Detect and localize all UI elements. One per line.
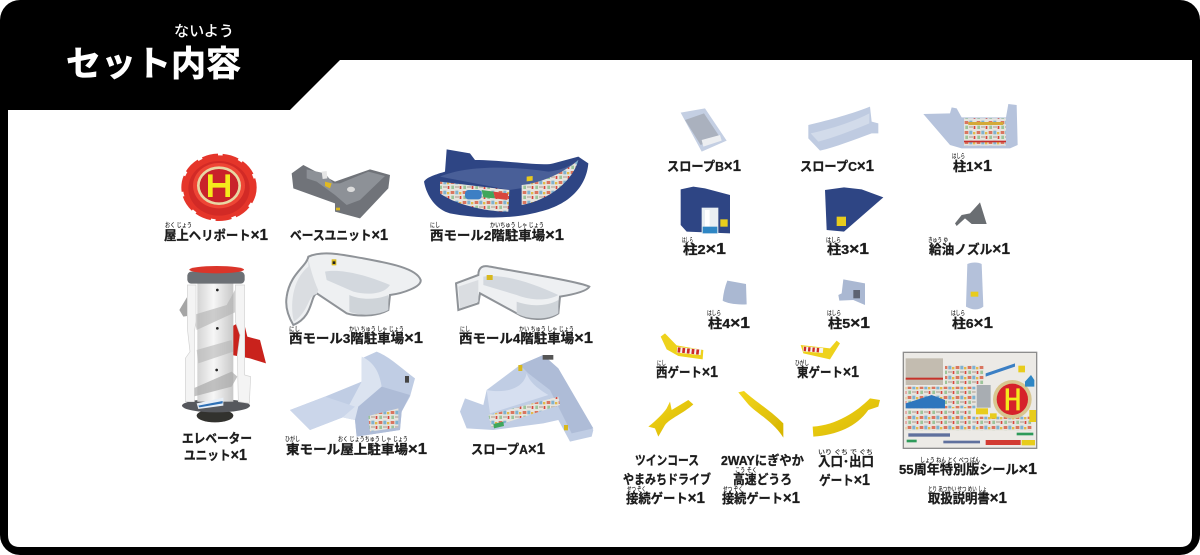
label ruby: かいちゅう しゃ じょう — [490, 221, 544, 229]
label: ゲート×1 — [819, 472, 870, 489]
item: west mall 3F parking — [286, 253, 423, 347]
icon: pillar 3 — [825, 187, 883, 232]
label ruby: はしら — [826, 236, 841, 244]
icon: slope A — [460, 355, 593, 442]
item: pillar 2 — [681, 187, 730, 258]
label: 取扱説明書×1 — [928, 490, 1007, 507]
item: pillar 3 — [825, 187, 883, 258]
icon: fuel nozzle — [955, 202, 987, 226]
icon: east mall roof — [290, 352, 415, 437]
label: 柱3×1 — [827, 241, 869, 258]
item: pillar 1 — [923, 104, 1018, 175]
title — [66, 23, 241, 84]
item: slope C — [800, 107, 878, 175]
label: スロープB×1 — [667, 158, 741, 175]
label: 柱6×1 — [952, 315, 993, 332]
label: 西モール2階駐車場×1 — [430, 227, 564, 244]
icon: pillar 2 — [681, 187, 730, 234]
label: ツインコース — [635, 453, 699, 468]
item: west mall 2F parking — [424, 149, 588, 244]
label: 屋上ヘリポート×1 — [164, 227, 268, 244]
label ruby: にし — [657, 359, 666, 367]
label: 西モール4階駐車場×1 — [459, 330, 593, 347]
icon: west mall 4F — [456, 266, 589, 319]
label: 柱2×1 — [683, 241, 726, 258]
icon: pillar 5 — [838, 279, 865, 305]
label ruby: にし — [289, 325, 300, 333]
label ruby: とり あつかい せつ めい しょ — [928, 485, 987, 493]
item: entrance exit gate — [813, 398, 880, 489]
icon: west mall 2F — [424, 149, 588, 217]
item: slope B — [667, 108, 741, 175]
label ruby: かい ちゅう しゃ じょう — [519, 325, 574, 333]
item: east mall roof parking — [285, 352, 427, 458]
label: エレベーター — [182, 431, 252, 446]
icon: pillar 4 — [723, 281, 747, 304]
icon: pillar 1 — [923, 104, 1018, 148]
label ruby: ひがし — [795, 358, 809, 367]
label ruby: おく じょうちゅう しゃ じょう — [338, 435, 408, 443]
label: 入口･出口 — [818, 454, 874, 469]
icon: east gate — [801, 341, 840, 359]
label: 給油ノズル×1 — [929, 241, 1010, 258]
icon: base unit — [292, 165, 390, 218]
item: pillar 6 — [951, 263, 993, 332]
label: やまみちドライブ — [623, 472, 711, 487]
title text: セット内容 — [66, 45, 241, 84]
label ruby: しょう ねん とく べつ ばん — [920, 455, 980, 464]
label ruby: はしら — [707, 309, 721, 317]
label ruby: せつ ぞく — [723, 485, 743, 493]
item: west gate — [656, 333, 718, 381]
label: 西ゲート×1 — [656, 364, 718, 381]
label: 2WAYにぎやか — [721, 453, 804, 468]
label: 接続ゲート×1 — [722, 490, 800, 507]
label ruby: きゅう ゆ — [928, 236, 948, 244]
label: 接続ゲート×1 — [626, 490, 705, 507]
label ruby: おく じょう — [165, 221, 192, 229]
item: base unit — [290, 165, 390, 244]
label ruby: はしら — [682, 236, 693, 244]
label: 柱5×1 — [828, 315, 870, 332]
item: fuel nozzle — [928, 202, 1010, 258]
icon: 2WAY connector — [738, 391, 783, 438]
label ruby: こう そく — [735, 466, 757, 474]
label: ユニット×1 — [184, 447, 247, 464]
item: elevator unit — [179, 266, 266, 464]
item: slope A — [460, 355, 593, 458]
label: 西モール3階駐車場×1 — [289, 330, 423, 347]
label: 東モール屋上駐車場 ×1 — [286, 441, 427, 458]
label: 東ゲート×1 — [797, 364, 859, 381]
title ruby: ないよう — [174, 23, 234, 40]
item: pillar 4 — [707, 281, 750, 332]
label: スロープA×1 — [471, 441, 545, 458]
item: instruction manual — [928, 485, 1007, 507]
item: east gate — [795, 341, 859, 381]
icon: slope B — [681, 108, 727, 152]
label: 柱4×1 — [708, 315, 750, 332]
icon: sticker sheet — [903, 352, 1037, 448]
label ruby: かい ちゅう しゃ じょう — [349, 325, 404, 333]
label ruby: にし — [430, 221, 440, 229]
icon: entrance exit gate — [813, 398, 880, 437]
label ruby: いり ぐち で ぐち — [818, 448, 873, 456]
icon: elevator — [179, 266, 266, 422]
item: pillar 5 — [827, 279, 870, 332]
icon: west mall 3F — [286, 253, 421, 325]
icon: twin connector — [648, 400, 693, 437]
icon: west gate — [661, 333, 703, 359]
label ruby: ひがし — [285, 434, 300, 443]
label ruby: はしら — [951, 309, 965, 317]
item: rooftop heliport — [164, 155, 268, 244]
label ruby: せつ ぞく — [627, 485, 646, 493]
icon: slope C — [808, 107, 878, 151]
label ruby: にし — [460, 325, 470, 333]
label: スロープC×1 — [800, 158, 874, 175]
item: 2WAY connector gate — [721, 391, 804, 507]
label ruby: はしら — [827, 309, 841, 317]
label: 高速どうろ — [733, 472, 792, 487]
icon: pillar 6 — [966, 263, 983, 309]
item: twin course connector gate — [623, 400, 711, 507]
icon: heliport — [183, 155, 255, 220]
label ruby: はしら — [952, 152, 965, 160]
label: 55周年特別版シール×1 — [899, 461, 1037, 478]
item: 55th anniversary sticker sheet — [899, 352, 1037, 478]
label: ベースユニット×1 — [290, 227, 388, 244]
label: 柱1×1 — [953, 158, 992, 175]
item: west mall 4F parking — [456, 266, 593, 347]
